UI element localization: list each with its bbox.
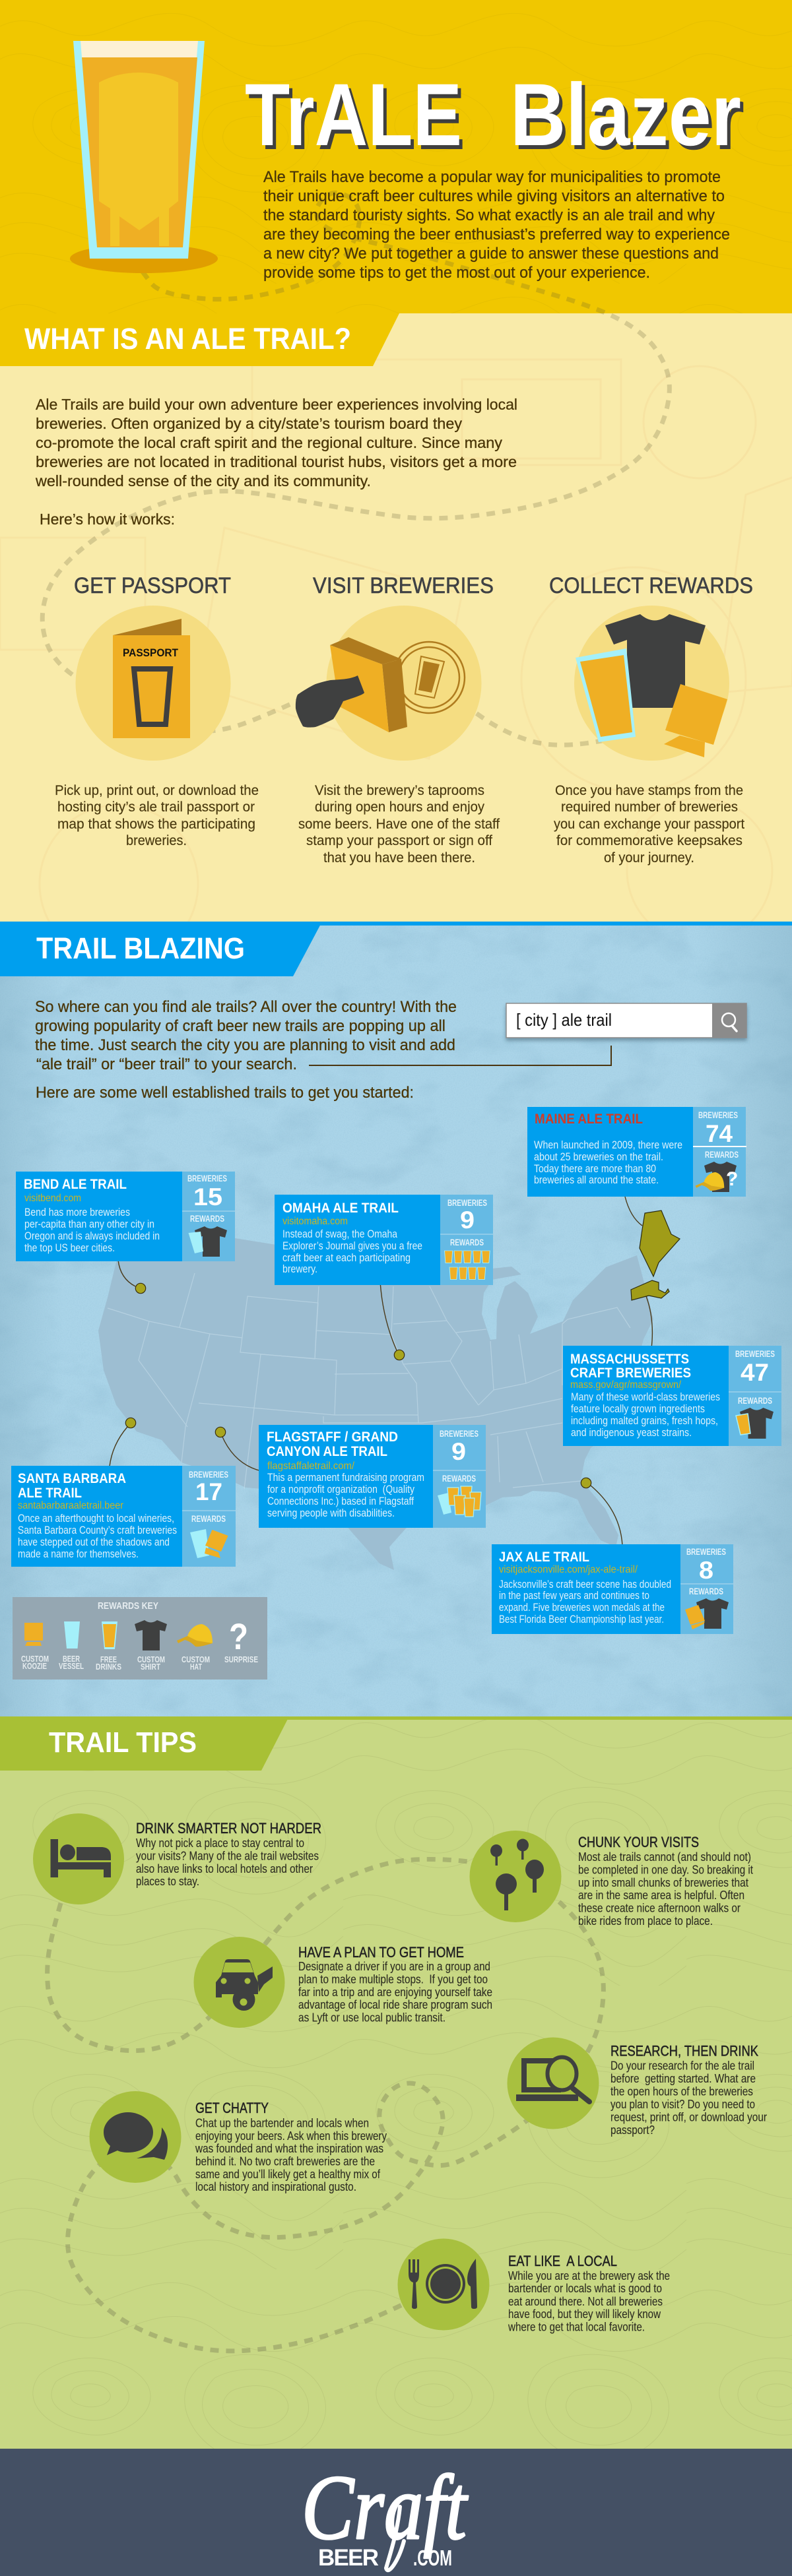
icon: speech bubbles bbox=[104, 2112, 168, 2160]
panel: trail tips background bbox=[0, 1716, 792, 2449]
text: breweries step: stamp your passport or sign off bbox=[306, 833, 492, 848]
card: massachusetts craft breweries: and indigenous yeast strains. bbox=[571, 1427, 692, 1439]
card: omaha ale trail: brewery. bbox=[282, 1263, 317, 1275]
text: passport step: breweries. bbox=[126, 833, 187, 848]
card: jax ale trail: JAX ALE TRAIL bbox=[499, 1550, 589, 1565]
card: bend ale trail: Oregon and is always included in bbox=[24, 1230, 160, 1242]
card: flagstaff grand canyon ale trail: for a nonprofit organization (Quality bbox=[267, 1484, 415, 1495]
step: collect rewards bbox=[549, 573, 753, 865]
icon: map pins bbox=[490, 1839, 544, 1910]
tip: have a plan to get home: as Lyft or use local public transit. bbox=[298, 2011, 446, 2024]
logo: craftbeer.com: Craft bbox=[302, 2457, 469, 2559]
tip: drink smarter not harder: DRINK SMARTER NOT HARDER bbox=[136, 1820, 321, 1837]
text block: ale trail definition: co-promote the local craft spirit and the regional culture. Since many bbox=[36, 434, 502, 451]
intro text: a new city? We put together a guide to answer these questions and bbox=[263, 245, 719, 263]
key: custom hat: CUSTOM bbox=[182, 1654, 210, 1664]
tip: get chatty: was founded and what the inspiration was bbox=[195, 2142, 383, 2155]
tip: get chatty: GET CHATTY bbox=[195, 2100, 269, 2116]
title: Blazer bbox=[510, 66, 741, 164]
card: maine ale trail: ? bbox=[726, 1168, 738, 1190]
card: jax ale trail: visitjacksonville.com/jax-ale-trail/ bbox=[499, 1564, 638, 1575]
text block: where to find ale trails: So where can you find ale trails? All over the country! With the bbox=[35, 998, 457, 1016]
card: massachusetts craft breweries bbox=[563, 1346, 781, 1446]
card: massachusetts craft breweries: feature locally grown ingredients bbox=[571, 1403, 705, 1415]
text: breweries step bbox=[298, 783, 500, 865]
intro text bbox=[263, 168, 730, 282]
tip: drink smarter not harder: your visits? Many of the ale trail websites bbox=[136, 1850, 319, 1863]
text block: ale trail definition: well-rounded sense of the city and its community. bbox=[35, 472, 371, 489]
tip: chunk your visits: CHUNK YOUR VISITS bbox=[578, 1834, 699, 1850]
heading banner: trail blazing bbox=[0, 922, 792, 976]
key: custom shirt: SHIRT bbox=[141, 1662, 160, 1672]
key: beer vessel bbox=[59, 1621, 84, 1671]
text: rewards step: you can exchange your passport bbox=[554, 817, 744, 832]
text: breweries step: that you have been there. bbox=[323, 850, 475, 865]
key: custom hat: HAT bbox=[190, 1662, 202, 1672]
key: free drinks bbox=[96, 1621, 121, 1672]
card: omaha ale trail: REWARDS bbox=[450, 1238, 484, 1247]
key: beer vessel: BEER bbox=[63, 1654, 80, 1664]
text: rewards step: Once you have stamps from the bbox=[555, 783, 743, 798]
icon: bed bbox=[50, 1839, 111, 1877]
text: passport step: map that shows the participating bbox=[57, 817, 255, 832]
logo: craftbeer.com: BEER bbox=[318, 2545, 379, 2571]
key: surprise: ? bbox=[229, 1616, 248, 1657]
step: visit breweries bbox=[296, 573, 500, 865]
card: omaha ale trail: BREWERIES bbox=[447, 1198, 487, 1208]
step: visit breweries: VISIT BREWERIES bbox=[313, 573, 494, 598]
footer bbox=[0, 2449, 792, 2576]
text: breweries step: during open hours and enjoy bbox=[315, 800, 484, 815]
key: custom hat bbox=[177, 1624, 213, 1672]
key: custom shirt bbox=[135, 1620, 167, 1672]
text: breweries step: some beers. Have one of the staff bbox=[298, 817, 500, 832]
tip: research then drink: the open hours of the breweries bbox=[610, 2085, 753, 2098]
card: bend ale trail: 15 bbox=[193, 1183, 222, 1210]
tip: get chatty: same and you’ll likely get a healthy mix of bbox=[195, 2168, 381, 2181]
icon: car and key bbox=[216, 1959, 273, 2011]
card: flagstaff grand canyon ale trail: CANYON ALE TRAIL bbox=[267, 1444, 387, 1459]
card: flagstaff grand canyon ale trail: 9 bbox=[451, 1438, 466, 1465]
heading banner: trail tips: TRAIL TIPS bbox=[49, 1726, 197, 1759]
trail: dashed path through tips bbox=[48, 1859, 603, 2351]
icon: plate fork knife bbox=[409, 2259, 477, 2309]
tip: get chatty bbox=[90, 2091, 387, 2193]
tip: eat like a local: EAT LIKE A LOCAL bbox=[508, 2253, 617, 2269]
card: massachusetts craft breweries: MASSACHUSSETTS bbox=[570, 1352, 689, 1367]
panel: what is an ale trail background bbox=[0, 313, 792, 963]
text block: where to find ale trails: the time. Just search the city you are planning to visit and add bbox=[35, 1036, 455, 1054]
panel: trail blazing background bbox=[0, 922, 792, 1717]
card: jax ale trail: 8 bbox=[699, 1557, 713, 1584]
card: omaha ale trail bbox=[275, 1195, 493, 1285]
heading banner: what is an ale trail bbox=[0, 313, 399, 366]
text block: ale trail definition: Here’s how it works: bbox=[40, 511, 175, 528]
text block: ale trail definition bbox=[35, 396, 517, 528]
tip: chunk your visits: are in the same area is helpful. Often bbox=[578, 1889, 744, 1902]
card: bend ale trail: BREWERIES bbox=[187, 1174, 227, 1183]
intro text: their unique craft beer cultures while giving visitors an alternative to bbox=[263, 187, 725, 205]
tip: have a plan to get home bbox=[194, 1937, 492, 2028]
search box: [ city ] ale trail bbox=[516, 1010, 612, 1030]
text: rewards step: for commemorative keepsakes bbox=[556, 833, 742, 848]
rewards key bbox=[13, 1597, 267, 1680]
trail: dashed path through header and ale trail section bbox=[42, 193, 669, 745]
card: maine ale trail: 74 bbox=[706, 1120, 733, 1147]
icon: rewards shirt glass koozie bbox=[576, 614, 727, 757]
card: flagstaff grand canyon ale trail: REWARDS bbox=[442, 1474, 476, 1484]
title: TrALE bbox=[245, 66, 462, 164]
icon: passport: PASSPORT bbox=[123, 646, 179, 659]
tip: eat like a local: eat around there. Not all breweries bbox=[508, 2295, 663, 2308]
text block: where to find ale trails bbox=[35, 998, 457, 1102]
intro text: Ale Trails have become a popular way for municipalities to promote bbox=[263, 168, 721, 186]
card: massachusetts craft breweries: including malted grains, fresh hops, bbox=[571, 1415, 718, 1427]
step: collect rewards: COLLECT REWARDS bbox=[549, 573, 753, 598]
tip: have a plan to get home: HAVE A PLAN TO GET HOME bbox=[298, 1944, 464, 1961]
tip: drink smarter not harder: Why not pick a place to stay central to bbox=[136, 1837, 304, 1850]
intro text: provide some tips to get the most out of your experience. bbox=[263, 264, 650, 282]
tip: eat like a local bbox=[397, 2239, 670, 2334]
key: custom koozie: KOOZIE bbox=[22, 1661, 47, 1671]
card: jax ale trail: Best Florida Beer Championship last year. bbox=[499, 1614, 664, 1625]
text: rewards step: required number of breweries bbox=[561, 800, 738, 815]
tip: have a plan to get home: advantage of local ride share program such bbox=[298, 1998, 492, 2011]
key: free drinks: FREE bbox=[100, 1654, 117, 1664]
card: bend ale trail: Bend has more breweries bbox=[24, 1207, 130, 1218]
tip: chunk your visits: be completed in one day. So breaking it bbox=[578, 1863, 753, 1876]
card: bend ale trail: per-capita than any other city in bbox=[24, 1218, 154, 1230]
rewards key: REWARDS KEY bbox=[98, 1600, 158, 1612]
card: massachusetts craft breweries: CRAFT BREWERIES bbox=[570, 1366, 691, 1381]
tip: chunk your visits: these create nice afternoon walks or bbox=[578, 1901, 741, 1914]
tip: get chatty: enjoying your beers. Ask when this brewery bbox=[195, 2129, 387, 2143]
card: bend ale trail: the top US beer cities. bbox=[24, 1242, 115, 1254]
text block: where to find ale trails: “ale trail” or “beer trail” to your search. bbox=[36, 1055, 297, 1073]
tip: have a plan to get home: Designate a driver if you are in a group and bbox=[298, 1960, 490, 1973]
card: santa barbara ale trail: Once an afterthought to local wineries, bbox=[18, 1513, 174, 1524]
tip: chunk your visits: bike rides from place to place. bbox=[578, 1914, 713, 1928]
tip: research then drink: before getting started. What are bbox=[610, 2072, 756, 2085]
card: jax ale trail bbox=[492, 1544, 733, 1634]
card: flagstaff grand canyon ale trail: This a permanent fundraising program bbox=[267, 1472, 424, 1484]
card: maine ale trail: Today there are more than 80 bbox=[534, 1163, 656, 1175]
tip: drink smarter not harder: also have links to local hotels and other bbox=[136, 1862, 313, 1875]
card: maine ale trail: MAINE ALE TRAIL bbox=[535, 1112, 643, 1127]
step: get passport: GET PASSPORT bbox=[74, 573, 231, 598]
card: omaha ale trail: OMAHA ALE TRAIL bbox=[282, 1201, 399, 1216]
card: flagstaff grand canyon ale trail: serving people with disabilities. bbox=[267, 1507, 395, 1519]
card: santa barbara ale trail: santabarbaraaletrail.beer bbox=[18, 1500, 124, 1511]
text: passport step: hosting city’s ale trail passport or bbox=[57, 800, 255, 815]
text block: ale trail definition: Ale Trails are build your own adventure beer experiences involving local bbox=[36, 396, 517, 413]
card: santa barbara ale trail bbox=[11, 1466, 236, 1567]
card: massachusetts craft breweries: BREWERIES bbox=[735, 1349, 775, 1359]
tip: eat like a local: While you are at the brewery ask the bbox=[508, 2269, 670, 2282]
card: massachusetts craft breweries: Many of these world-class breweries bbox=[571, 1391, 720, 1403]
key: custom shirt: CUSTOM bbox=[137, 1654, 165, 1664]
text: rewards step: of your journey. bbox=[604, 850, 694, 865]
card: santa barbara ale trail: Santa Barbara County’s craft breweries bbox=[18, 1524, 177, 1536]
card: bend ale trail bbox=[16, 1172, 235, 1261]
icon: laptop and magnifier bbox=[516, 2057, 589, 2102]
key: custom koozie: CUSTOM bbox=[21, 1654, 49, 1664]
intro text: are they becoming the beer enthusiast’s preferred way to experience bbox=[263, 226, 730, 243]
tip: drink smarter not harder bbox=[33, 1813, 321, 1904]
card: santa barbara ale trail: BREWERIES bbox=[189, 1470, 228, 1480]
intro text: the standard touristy sights. So what exactly is an ale trail and why bbox=[263, 206, 715, 224]
tip: chunk your visits: up into small chunks of breweries that bbox=[578, 1876, 748, 1889]
panel: header background bbox=[0, 0, 792, 317]
card: maine ale trail: REWARDS bbox=[705, 1150, 739, 1160]
tip: get chatty: Chat up the bartender and locals when bbox=[195, 2116, 369, 2129]
card: flagstaff grand canyon ale trail: BREWERIES bbox=[440, 1429, 478, 1439]
card: flagstaff grand canyon ale trail: Connections Inc.) based in Flagstaff bbox=[267, 1495, 414, 1507]
tip: eat like a local: where to get that local favorite. bbox=[508, 2321, 645, 2334]
card: santa barbara ale trail: SANTA BARBARA bbox=[18, 1471, 126, 1486]
text: breweries step: Visit the brewery’s taprooms bbox=[315, 783, 484, 798]
card: omaha ale trail: Explorer’s Journal gives you a free bbox=[282, 1240, 422, 1252]
card: massachusetts craft breweries: REWARDS bbox=[738, 1396, 772, 1406]
card: santa barbara ale trail: 17 bbox=[195, 1478, 222, 1505]
card: santa barbara ale trail: made a name for themselves. bbox=[18, 1548, 139, 1560]
card: jax ale trail: expand. Five breweries won medals at the bbox=[499, 1602, 665, 1614]
card: maine ale trail: BREWERIES bbox=[698, 1110, 738, 1120]
tip: research then drink bbox=[507, 2037, 767, 2137]
icon: eight free drinks bbox=[445, 1251, 490, 1280]
key: surprise: SURPRISE bbox=[224, 1654, 258, 1664]
tip: eat like a local: have food, but they will likely know bbox=[508, 2308, 661, 2321]
heading banner: trail tips bbox=[0, 1716, 792, 1771]
text block: where to find ale trails: Here are some well established trails to get you started: bbox=[36, 1084, 414, 1102]
icon: vessel and five drinks bbox=[438, 1486, 481, 1517]
tip: have a plan to get home: far into a trip and are enjoying yourself take bbox=[298, 1986, 492, 1999]
map highlight: massachusetts bbox=[631, 1280, 669, 1300]
map highlight: maine bbox=[640, 1210, 680, 1276]
search box bbox=[506, 1003, 746, 1038]
title: TrALE bbox=[248, 70, 465, 168]
tip: drink smarter not harder: places to stay. bbox=[136, 1875, 199, 1888]
card: flagstaff grand canyon ale trail: flagstaffaletrail.com/ bbox=[267, 1461, 355, 1472]
heading banner: trail blazing: TRAIL BLAZING bbox=[36, 931, 245, 965]
card: jax ale trail: REWARDS bbox=[689, 1586, 723, 1596]
icon: passport bbox=[113, 619, 190, 738]
card: jax ale trail: in the past few years and continues to bbox=[499, 1590, 649, 1602]
tip: research then drink: passport? bbox=[610, 2123, 655, 2137]
card: bend ale trail: REWARDS bbox=[190, 1214, 224, 1224]
card: flagstaff grand canyon ale trail bbox=[259, 1425, 486, 1528]
tip: eat like a local: bartender or locals what is good to bbox=[508, 2282, 662, 2295]
step: get passport bbox=[55, 573, 259, 848]
card: omaha ale trail: Instead of swag, the Omaha bbox=[282, 1228, 398, 1240]
tip: research then drink: RESEARCH, THEN DRINK bbox=[610, 2042, 758, 2059]
text block: where to find ale trails: growing popularity of craft beer new trails are popping up all bbox=[35, 1017, 446, 1035]
key: free drinks: DRINKS bbox=[96, 1662, 121, 1672]
text: passport step: Pick up, print out, or download the bbox=[55, 783, 259, 798]
text block: ale trail definition: breweries. Often organized by a city/state’s tourism board they bbox=[36, 415, 463, 432]
text block: ale trail definition: breweries are not located in traditional tourist hubs, visitors get a more bbox=[36, 453, 517, 470]
card: massachusetts craft breweries: 47 bbox=[741, 1359, 769, 1386]
card: bend ale trail: BEND ALE TRAIL bbox=[24, 1177, 127, 1192]
logo: craftbeer.com: .COM bbox=[413, 2546, 452, 2570]
card: bend ale trail: visitbend.com bbox=[24, 1193, 81, 1204]
card: maine ale trail bbox=[527, 1107, 746, 1197]
key: custom koozie bbox=[21, 1623, 49, 1671]
card: omaha ale trail: visitomaha.com bbox=[282, 1216, 348, 1227]
tip: have a plan to get home: plan to make multiple stops. If you get too bbox=[298, 1972, 488, 1986]
card: santa barbara ale trail: REWARDS bbox=[191, 1514, 226, 1524]
tip: get chatty: local history and inspirational gusto. bbox=[195, 2180, 356, 2193]
key: surprise bbox=[224, 1616, 258, 1664]
icon: pint glass bbox=[70, 41, 218, 273]
tip: chunk your visits: Most ale trails cannot (and should not) bbox=[578, 1850, 751, 1864]
title: Blazer bbox=[513, 70, 744, 168]
card: santa barbara ale trail: ALE TRAIL bbox=[18, 1486, 82, 1501]
map pins and leader lines bbox=[110, 1197, 652, 1546]
key: beer vessel: VESSEL bbox=[59, 1661, 84, 1671]
card: jax ale trail: Jacksonville’s craft beer scene has doubled bbox=[499, 1579, 671, 1590]
card: maine ale trail: about 25 breweries on the trail. bbox=[534, 1151, 663, 1163]
card: massachusetts craft breweries: mass.gov/agr/massgrown/ bbox=[570, 1379, 681, 1391]
tip: research then drink: request, print off, or download your bbox=[610, 2111, 767, 2124]
card: maine ale trail: When launched in 2009, there were bbox=[534, 1139, 682, 1151]
tip: research then drink: Do your research for the ale trail bbox=[610, 2059, 754, 2073]
map: united states bbox=[98, 1238, 653, 1570]
card: omaha ale trail: craft beer at each participating bbox=[282, 1252, 411, 1264]
card: flagstaff grand canyon ale trail: FLAGSTAFF / GRAND bbox=[267, 1429, 398, 1445]
heading banner: what is an ale trail: WHAT IS AN ALE TRAIL? bbox=[24, 322, 351, 356]
card: omaha ale trail: 9 bbox=[460, 1207, 475, 1234]
text: passport step bbox=[55, 783, 259, 848]
tip: get chatty: behind it. No two craft breweries are the bbox=[195, 2154, 375, 2168]
arrow: text to search box bbox=[309, 1046, 611, 1065]
tip: chunk your visits bbox=[470, 1831, 753, 1928]
title bbox=[245, 66, 744, 168]
card: jax ale trail: BREWERIES bbox=[686, 1547, 726, 1557]
text: rewards step bbox=[554, 783, 744, 865]
icon: stamp bbox=[296, 637, 465, 732]
tip: research then drink: you plan to visit? Do you need to bbox=[610, 2098, 755, 2111]
card: santa barbara ale trail: have stepped out of the shadows and bbox=[18, 1536, 170, 1548]
card: maine ale trail: breweries all around the state. bbox=[534, 1174, 659, 1186]
